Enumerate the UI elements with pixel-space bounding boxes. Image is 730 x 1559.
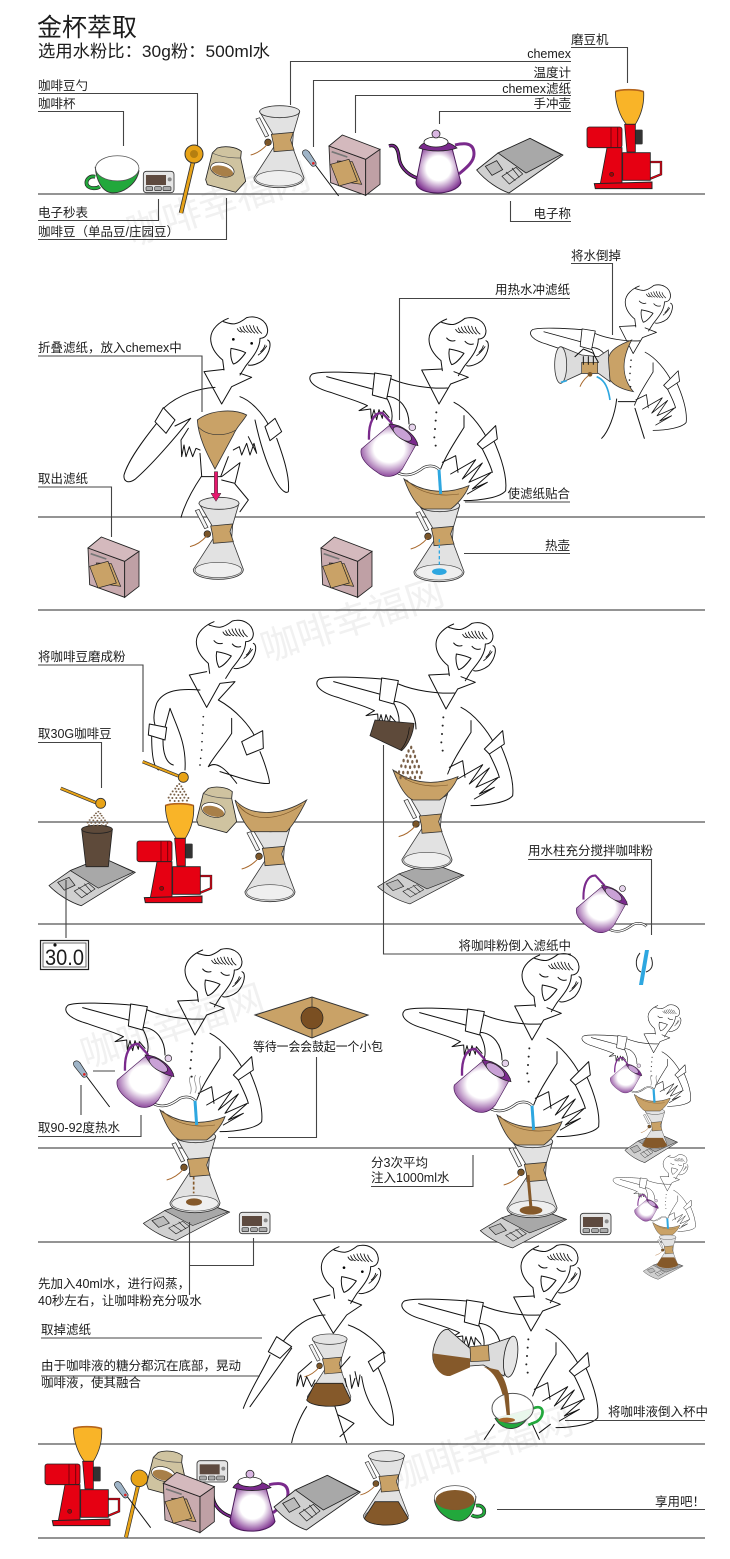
label: bloom note: 等待一会会鼓起一个小包 — [253, 1039, 383, 1054]
spoon over grinder — [143, 762, 188, 782]
icon: filter box second — [321, 537, 372, 597]
figure: woman with spoon and bag — [148, 620, 269, 784]
label: add grounds — [384, 745, 571, 954]
label: coffee cup: 咖啡杯 — [38, 96, 76, 111]
label: grinder — [571, 33, 628, 83]
label: timer: 电子秒表 — [38, 206, 89, 220]
canister — [82, 825, 112, 867]
panel: rinse filter step — [310, 318, 506, 582]
chemex with coffee — [504, 1136, 557, 1218]
icon: timer — [239, 1212, 270, 1234]
panel: finished lineup — [45, 1427, 484, 1537]
label: fold filter — [38, 337, 202, 412]
label: pour away — [571, 249, 621, 335]
tilted chemex with coffee — [433, 1329, 520, 1413]
label: bloom note — [228, 1039, 383, 1138]
panel: bloom step — [38, 949, 383, 1309]
label: warm pot — [464, 538, 570, 554]
label: filter fit: 使滤纸贴合 — [507, 486, 570, 501]
label: chemex filter: chemex滤纸 — [502, 82, 571, 96]
panel: swirl step — [243, 1245, 394, 1443]
label: stir with water: 用水柱充分搅拌咖啡粉 — [528, 843, 654, 858]
background watermark: 咖啡幸福网 — [76, 978, 269, 1077]
label: hot water — [38, 1115, 141, 1136]
label: pour-over kettle — [440, 96, 571, 124]
icon: spoon — [126, 1470, 148, 1537]
label: stir with water — [528, 843, 654, 935]
icon: thermometer — [114, 1482, 151, 1528]
spoon at canister — [61, 788, 106, 808]
label: add grounds: 将咖啡粉倒入滤纸中 — [458, 938, 571, 953]
chemex under filter — [190, 497, 243, 579]
label: thermometer — [314, 65, 571, 147]
inverted chemex — [555, 340, 644, 438]
figure: woman pouring — [403, 954, 599, 1145]
label: take 30g — [38, 726, 112, 788]
icon: coffee bag — [206, 147, 246, 192]
label: grind beans — [38, 649, 143, 752]
icon: timer — [580, 1213, 611, 1235]
section divider rules — [38, 194, 705, 1538]
coffee bag — [197, 787, 237, 833]
figure: woman holding filter — [124, 317, 289, 517]
label: grind beans: 将咖啡豆磨成粉 — [38, 649, 126, 664]
icon: cup of coffee — [434, 1486, 484, 1521]
label: scale — [510, 201, 571, 222]
scale readout leader — [65, 880, 67, 938]
label: take 30g: 取30G咖啡豆 — [38, 726, 112, 741]
label: swirl instructions: 咖啡液，使其融合 — [41, 1372, 142, 1391]
small figure: third pour — [613, 1155, 695, 1279]
label: chemex: chemex — [527, 47, 572, 61]
label: coffee beans — [38, 198, 226, 240]
figure: woman pouring to cup — [402, 1245, 598, 1439]
icon: timer — [143, 171, 174, 193]
readout: 30.0: 30.0 — [45, 945, 84, 970]
label: three pours: 注入1000ml水 — [371, 1170, 450, 1185]
icon: chemex — [251, 106, 304, 188]
label: enjoy: 享用吧！ — [655, 1491, 705, 1510]
figure: woman tipping chemex — [530, 285, 686, 430]
water swirl — [636, 950, 652, 985]
icon: grinder — [45, 1427, 119, 1526]
chemex with coffee — [304, 1334, 351, 1406]
subtitle: 选用水粉比：30g粉：500ml水 — [38, 37, 270, 62]
label: take filter — [38, 472, 112, 537]
icon: scale — [477, 138, 563, 193]
background watermark: 咖啡幸福网 — [122, 156, 315, 255]
panel: fold filter step — [124, 317, 289, 579]
label: thermometer: 温度计 — [533, 65, 571, 80]
icon: kettle — [203, 1470, 288, 1531]
background watermark — [76, 156, 578, 1499]
icon: bag — [147, 1451, 187, 1497]
panel: three pours step — [371, 954, 695, 1279]
panel: serve step — [402, 1245, 598, 1439]
label: rinse filter: 用热水冲滤纸 — [495, 282, 570, 297]
scale — [49, 858, 135, 906]
small figure: second pour — [582, 1005, 691, 1163]
background watermark: 咖啡幸福网 — [385, 1400, 578, 1499]
icon: coffee cup — [87, 156, 139, 193]
label: hot water: 取90-92度热水 — [38, 1120, 120, 1135]
thermometer leader — [81, 1071, 115, 1115]
background watermark: 咖啡幸福网 — [256, 572, 449, 671]
panel: add grounds step — [317, 623, 654, 985]
icon: thermometer — [302, 150, 339, 196]
chemex and filter — [235, 800, 307, 902]
label: three pours — [371, 1155, 473, 1186]
icon: scale — [274, 1475, 360, 1530]
grinder — [137, 804, 211, 903]
icon: grinder — [587, 90, 661, 189]
panel: equipment overview — [38, 33, 661, 240]
hands — [297, 1357, 360, 1388]
label: coffee beans: 咖啡豆（单品豆/庄园豆） — [38, 221, 179, 240]
label: scale: 电子称 — [533, 207, 571, 221]
figure: woman pouring water — [310, 318, 506, 509]
label: chemex — [290, 47, 572, 105]
icon: box — [163, 1472, 214, 1533]
beans falling — [168, 783, 189, 802]
chemex with hot water — [411, 500, 464, 582]
label: remove filter: 取掉滤纸 — [41, 1323, 92, 1337]
label: pour away: 将水倒掉 — [571, 249, 621, 263]
label: swirl instructions — [41, 1355, 260, 1391]
label: bloom instructions: 40秒左右，让咖啡粉充分吸水 — [38, 1290, 202, 1309]
label: grinder: 磨豆机 — [571, 33, 609, 47]
label: coffee cup — [38, 96, 124, 146]
figure: woman holding chemex — [243, 1245, 394, 1443]
figure: woman pouring grounds — [317, 623, 513, 806]
filter with chemex and scale — [378, 770, 464, 904]
arrow: down into chemex — [211, 472, 221, 501]
canister tilted — [370, 720, 414, 751]
label: bean spoon — [38, 78, 198, 148]
label: take filter: 取出滤纸 — [38, 472, 89, 486]
panel: grind beans step — [49, 620, 307, 906]
figure: woman pouring, steam — [66, 949, 262, 1140]
beans falling second — [87, 811, 108, 826]
label: bean spoon: 咖啡豆勺 — [38, 78, 88, 93]
label: filter fit — [465, 486, 570, 502]
label: bloom instructions — [38, 1273, 202, 1309]
label: bloom instructions: 先加入40ml水，进行闷蒸， — [38, 1273, 190, 1292]
label: swirl instructions: 由于咖啡液的糖分都沉在底部，晃动 — [41, 1355, 241, 1374]
icon: chemex with coffee — [360, 1451, 408, 1525]
panel: discard water step — [530, 249, 686, 438]
label: chemex filter — [356, 82, 571, 133]
chemex dripping — [167, 1131, 220, 1213]
icon: thermometer — [73, 1061, 110, 1107]
timer and scale leaders — [190, 1222, 254, 1295]
scale under chemex — [143, 1200, 230, 1241]
scale under chemex — [480, 1207, 567, 1248]
icon: filter box — [329, 135, 380, 195]
label: warm pot: 热壶 — [545, 538, 570, 553]
label: fold filter: 折叠滤纸，放入chemex中 — [38, 337, 182, 356]
icon: spoon — [181, 145, 203, 213]
title: 金杯萃取 — [37, 14, 137, 42]
icon: kettle — [389, 130, 474, 193]
folded filter — [197, 411, 247, 469]
grounds falling — [398, 746, 423, 780]
label: three pours: 分3次平均 — [371, 1156, 428, 1170]
icon: filter box — [88, 537, 139, 597]
icon: timer — [197, 1461, 228, 1482]
label: pour-over kettle: 手冲壶 — [533, 96, 571, 111]
kettle stirring — [576, 876, 646, 933]
green cup — [492, 1393, 543, 1429]
bloom diagram — [255, 997, 368, 1038]
label: pour to cup: 将咖啡液倒入杯中 — [608, 1404, 708, 1419]
label: timer — [38, 199, 158, 220]
label: rinse filter — [400, 282, 570, 420]
